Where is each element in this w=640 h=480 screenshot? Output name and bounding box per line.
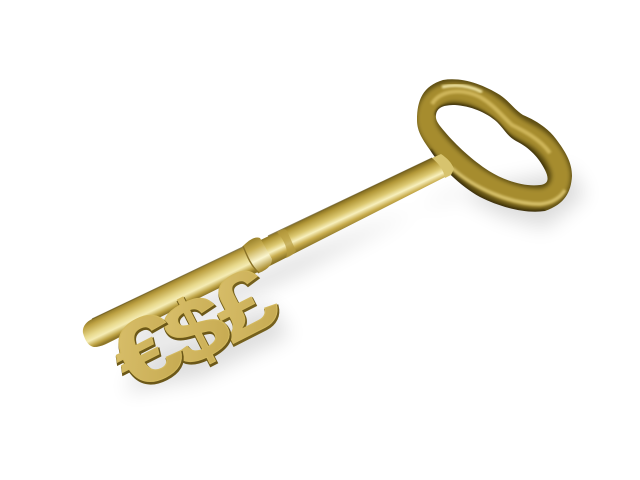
small ridge near collar	[277, 229, 296, 258]
key bow ring	[417, 79, 572, 212]
outer lower rim shadow	[430, 150, 545, 212]
ring body	[426, 92, 561, 198]
top face highlight	[432, 92, 550, 153]
key shaft	[83, 158, 453, 347]
bottom face highlight	[452, 168, 565, 204]
drop shadow of key	[125, 170, 585, 392]
left inner highlight	[442, 86, 482, 92]
symbol: euro: €	[95, 291, 199, 411]
symbol: euro: €	[96, 293, 200, 413]
inner rim shadow	[436, 105, 545, 170]
symbol: dollar: $	[147, 273, 246, 388]
lower shaft section	[83, 244, 262, 347]
symbol: pound: £	[196, 247, 293, 361]
dark upper edge	[92, 158, 432, 319]
illustration: golden key with currency symbols	[82, 79, 586, 394]
symbol: pound: £	[197, 248, 294, 363]
key collar	[243, 237, 272, 273]
currency symbols	[95, 247, 294, 413]
upper shaft section	[250, 158, 453, 276]
symbol: dollar: $	[148, 275, 247, 390]
shaft neck	[432, 154, 454, 178]
